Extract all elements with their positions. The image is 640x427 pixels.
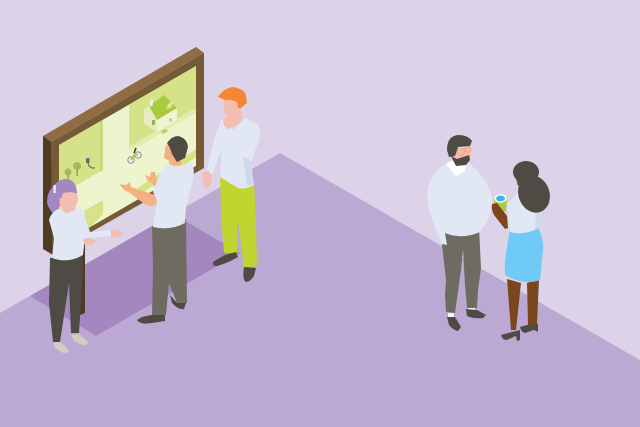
map road strip xyxy=(133,149,196,198)
face xyxy=(514,170,523,186)
rug: shadow area on floor xyxy=(30,214,240,336)
face xyxy=(164,143,176,162)
hair xyxy=(167,136,188,162)
front hand xyxy=(111,229,124,238)
arm and hand pointing xyxy=(119,182,158,206)
heels xyxy=(501,330,520,341)
person: orange-haired man xyxy=(202,87,260,282)
hair xyxy=(53,179,77,199)
beard xyxy=(451,155,470,166)
legs xyxy=(507,279,521,330)
map left park shade xyxy=(100,120,103,172)
icon: trees xyxy=(64,162,81,179)
face xyxy=(60,190,78,213)
map upper-right plot xyxy=(129,66,196,147)
person: bearded man in white jumper xyxy=(428,135,492,331)
torso xyxy=(153,162,194,228)
torso shade xyxy=(243,157,254,186)
map board xyxy=(43,47,204,315)
trousers xyxy=(49,253,83,342)
trousers xyxy=(442,227,481,313)
shoes xyxy=(213,252,238,266)
map left park panel xyxy=(59,120,103,196)
blouse shade xyxy=(535,210,543,230)
glasses xyxy=(458,147,471,155)
hair xyxy=(447,135,472,157)
neck xyxy=(168,156,182,166)
face xyxy=(224,98,241,118)
torso and arm xyxy=(49,205,114,260)
hair xyxy=(218,87,247,108)
socks xyxy=(448,313,454,318)
shoes xyxy=(447,317,461,331)
second hand xyxy=(145,172,162,190)
near hand xyxy=(83,238,96,245)
hair xyxy=(513,161,555,217)
map plot light verge xyxy=(129,108,196,152)
face xyxy=(452,146,471,164)
lower hand xyxy=(202,171,212,188)
map lower-left plot xyxy=(84,200,103,228)
icon: tiny pedestrian xyxy=(86,156,95,168)
jumper xyxy=(428,162,492,245)
board frame front xyxy=(51,53,204,255)
cup xyxy=(494,194,507,213)
trousers xyxy=(220,175,257,268)
person: man with dark hair at board xyxy=(119,136,194,324)
board frame top xyxy=(43,47,204,142)
collar xyxy=(446,160,466,176)
board frame left side xyxy=(43,136,53,255)
hair tie xyxy=(54,185,56,193)
trousers xyxy=(152,219,187,315)
raised hand xyxy=(223,116,233,129)
board post xyxy=(80,236,85,315)
map screen xyxy=(59,66,196,245)
person: woman with blue skirt xyxy=(492,161,555,341)
neck xyxy=(60,205,75,216)
floor xyxy=(0,153,640,427)
arm xyxy=(492,203,508,229)
shoes xyxy=(53,342,69,353)
ponytail xyxy=(47,185,60,214)
person: woman with purple hair xyxy=(47,179,124,353)
icon: bicycle xyxy=(128,148,141,163)
neck xyxy=(228,108,243,127)
torso and arm xyxy=(206,118,260,189)
icon: house xyxy=(144,95,177,134)
blouse xyxy=(507,193,543,233)
shoes xyxy=(137,315,165,324)
skirt xyxy=(505,227,543,282)
